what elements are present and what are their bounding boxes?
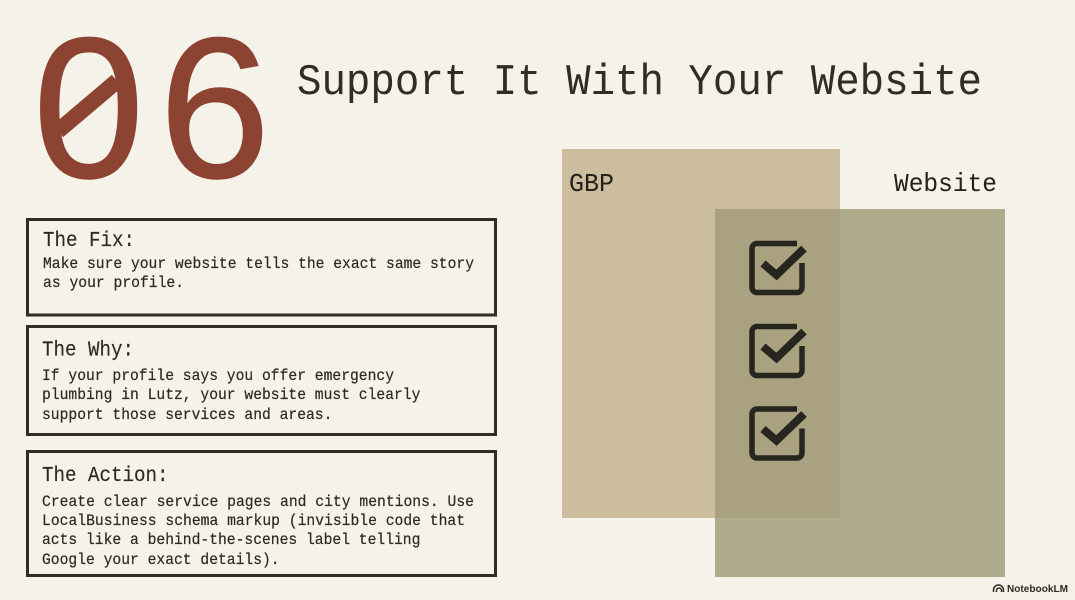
text: the action body: [42, 493, 474, 569]
icon: checkbox 3: [752, 409, 804, 458]
heading: the action: The Action:: [42, 465, 168, 488]
panel: the fix: [28, 220, 496, 315]
icon: notebook logo: [994, 585, 1004, 592]
heading: the why: The Why:: [42, 340, 134, 362]
big number 06: 06: [33, 0, 270, 220]
text: the action body: Google your exact details).: [42, 551, 280, 569]
text: the why body: If your profile says you offer emergency: [42, 367, 394, 385]
panel: the why: [28, 326, 496, 434]
panel: the action: [28, 452, 496, 576]
label: Website: Website: [894, 169, 997, 199]
heading: the fix: The Fix:: [43, 230, 135, 253]
panel: GBP: [562, 149, 840, 518]
overlap diagram: GBP and Website: [562, 149, 1005, 577]
panel: Website: [715, 209, 1005, 577]
text: the why body: plumbing in Lutz, your website must clearly: [42, 386, 421, 404]
icon: checkbox 1: [752, 244, 804, 292]
text: the action body: Create clear service pages and city mentions. Use: [42, 493, 474, 511]
text: the action body: LocalBusiness schema markup (invisible code that: [42, 512, 465, 530]
text: the fix body: Make sure your website tells the exact same story: [43, 255, 474, 273]
title: Support It With Your Website: [297, 58, 982, 108]
text: the fix body: as your profile.: [43, 274, 184, 292]
watermark: NotebookLM: NotebookLM: [1007, 583, 1068, 595]
panel: overlap: [715, 209, 840, 518]
text: the fix body: [43, 255, 474, 292]
label: GBP: GBP: [569, 169, 614, 199]
text: the why body: [42, 367, 421, 424]
icon: checkbox 2: [752, 326, 804, 376]
text: the why body: support those services and areas.: [42, 406, 332, 424]
text: the action body: acts like a behind-the-scenes label telling: [42, 531, 420, 549]
